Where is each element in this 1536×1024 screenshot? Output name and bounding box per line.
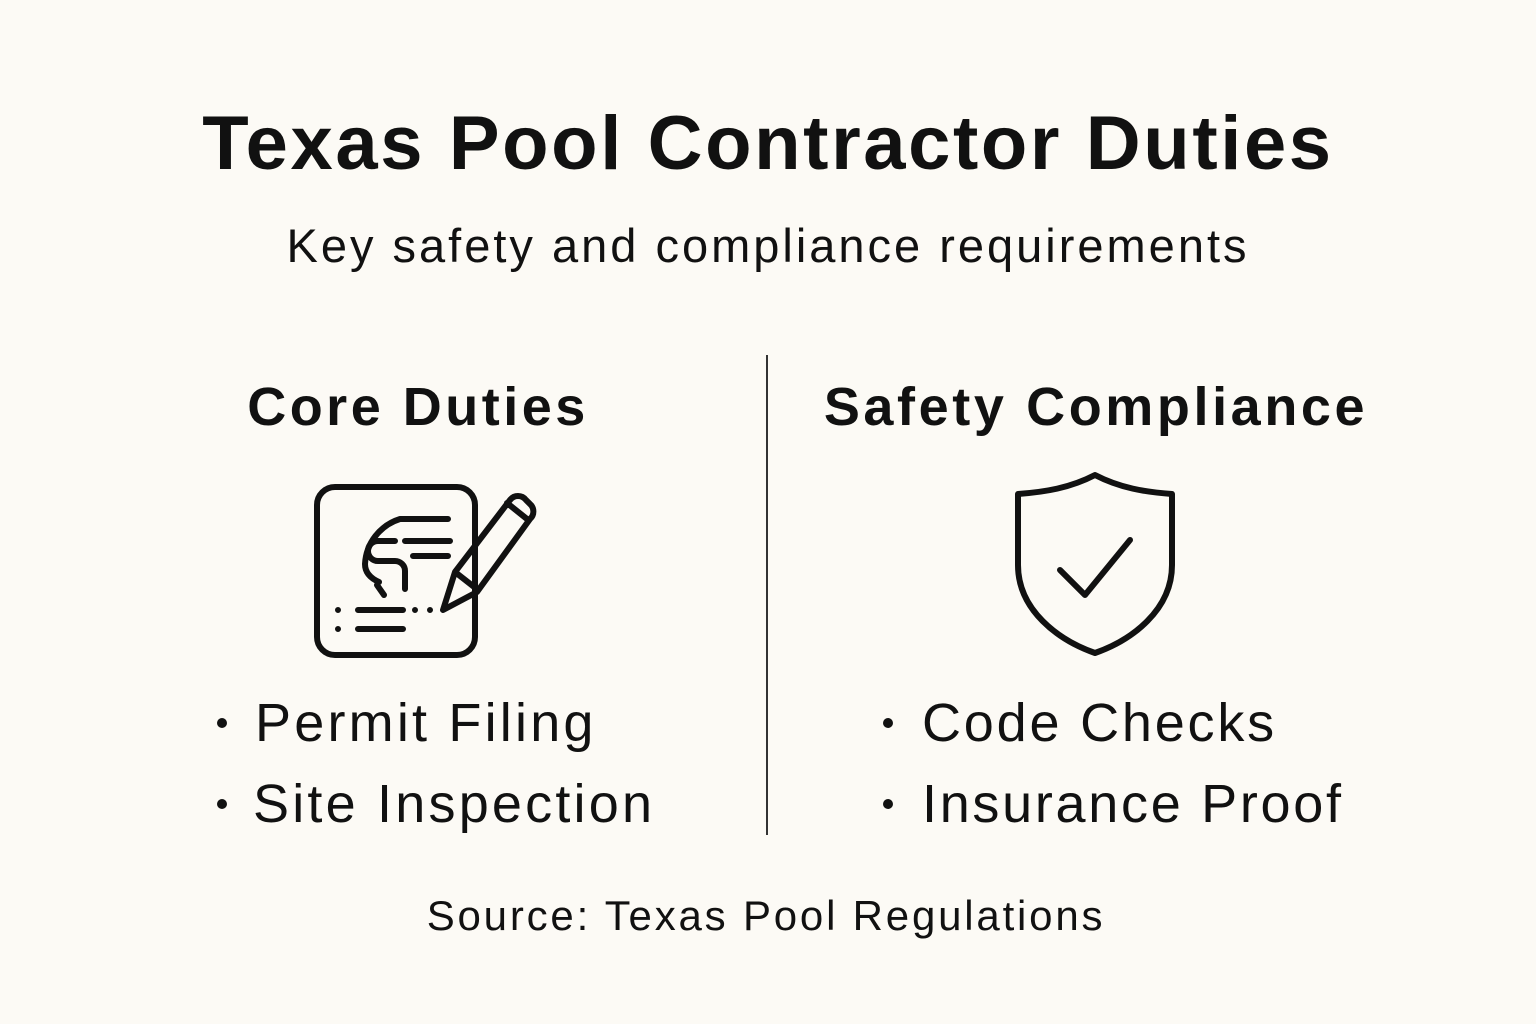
divider — [766, 355, 768, 835]
panel: core duties — [217, 377, 655, 834]
panel: safety compliance — [824, 377, 1368, 834]
subtitle: Key safety and compliance requirements — [286, 219, 1250, 272]
source note: Source: Texas Pool Regulations — [427, 892, 1105, 939]
bullet list: core duties: Site Inspection — [253, 774, 655, 834]
bullet list: safety compliance: Insurance Proof — [922, 774, 1344, 834]
heading: safety compliance: Safety Compliance — [824, 377, 1368, 437]
icon: permit document with pencil — [314, 484, 536, 658]
heading: core duties: Core Duties — [247, 377, 589, 437]
bullet list: core duties: Permit Filing — [255, 693, 597, 753]
title: Texas Pool Contractor Duties — [202, 101, 1334, 186]
bullet list: safety compliance — [883, 693, 1344, 834]
bullet list: core duties — [217, 693, 655, 834]
icon: shield with check — [1015, 472, 1175, 656]
bullet list: safety compliance: Code Checks — [922, 693, 1277, 753]
